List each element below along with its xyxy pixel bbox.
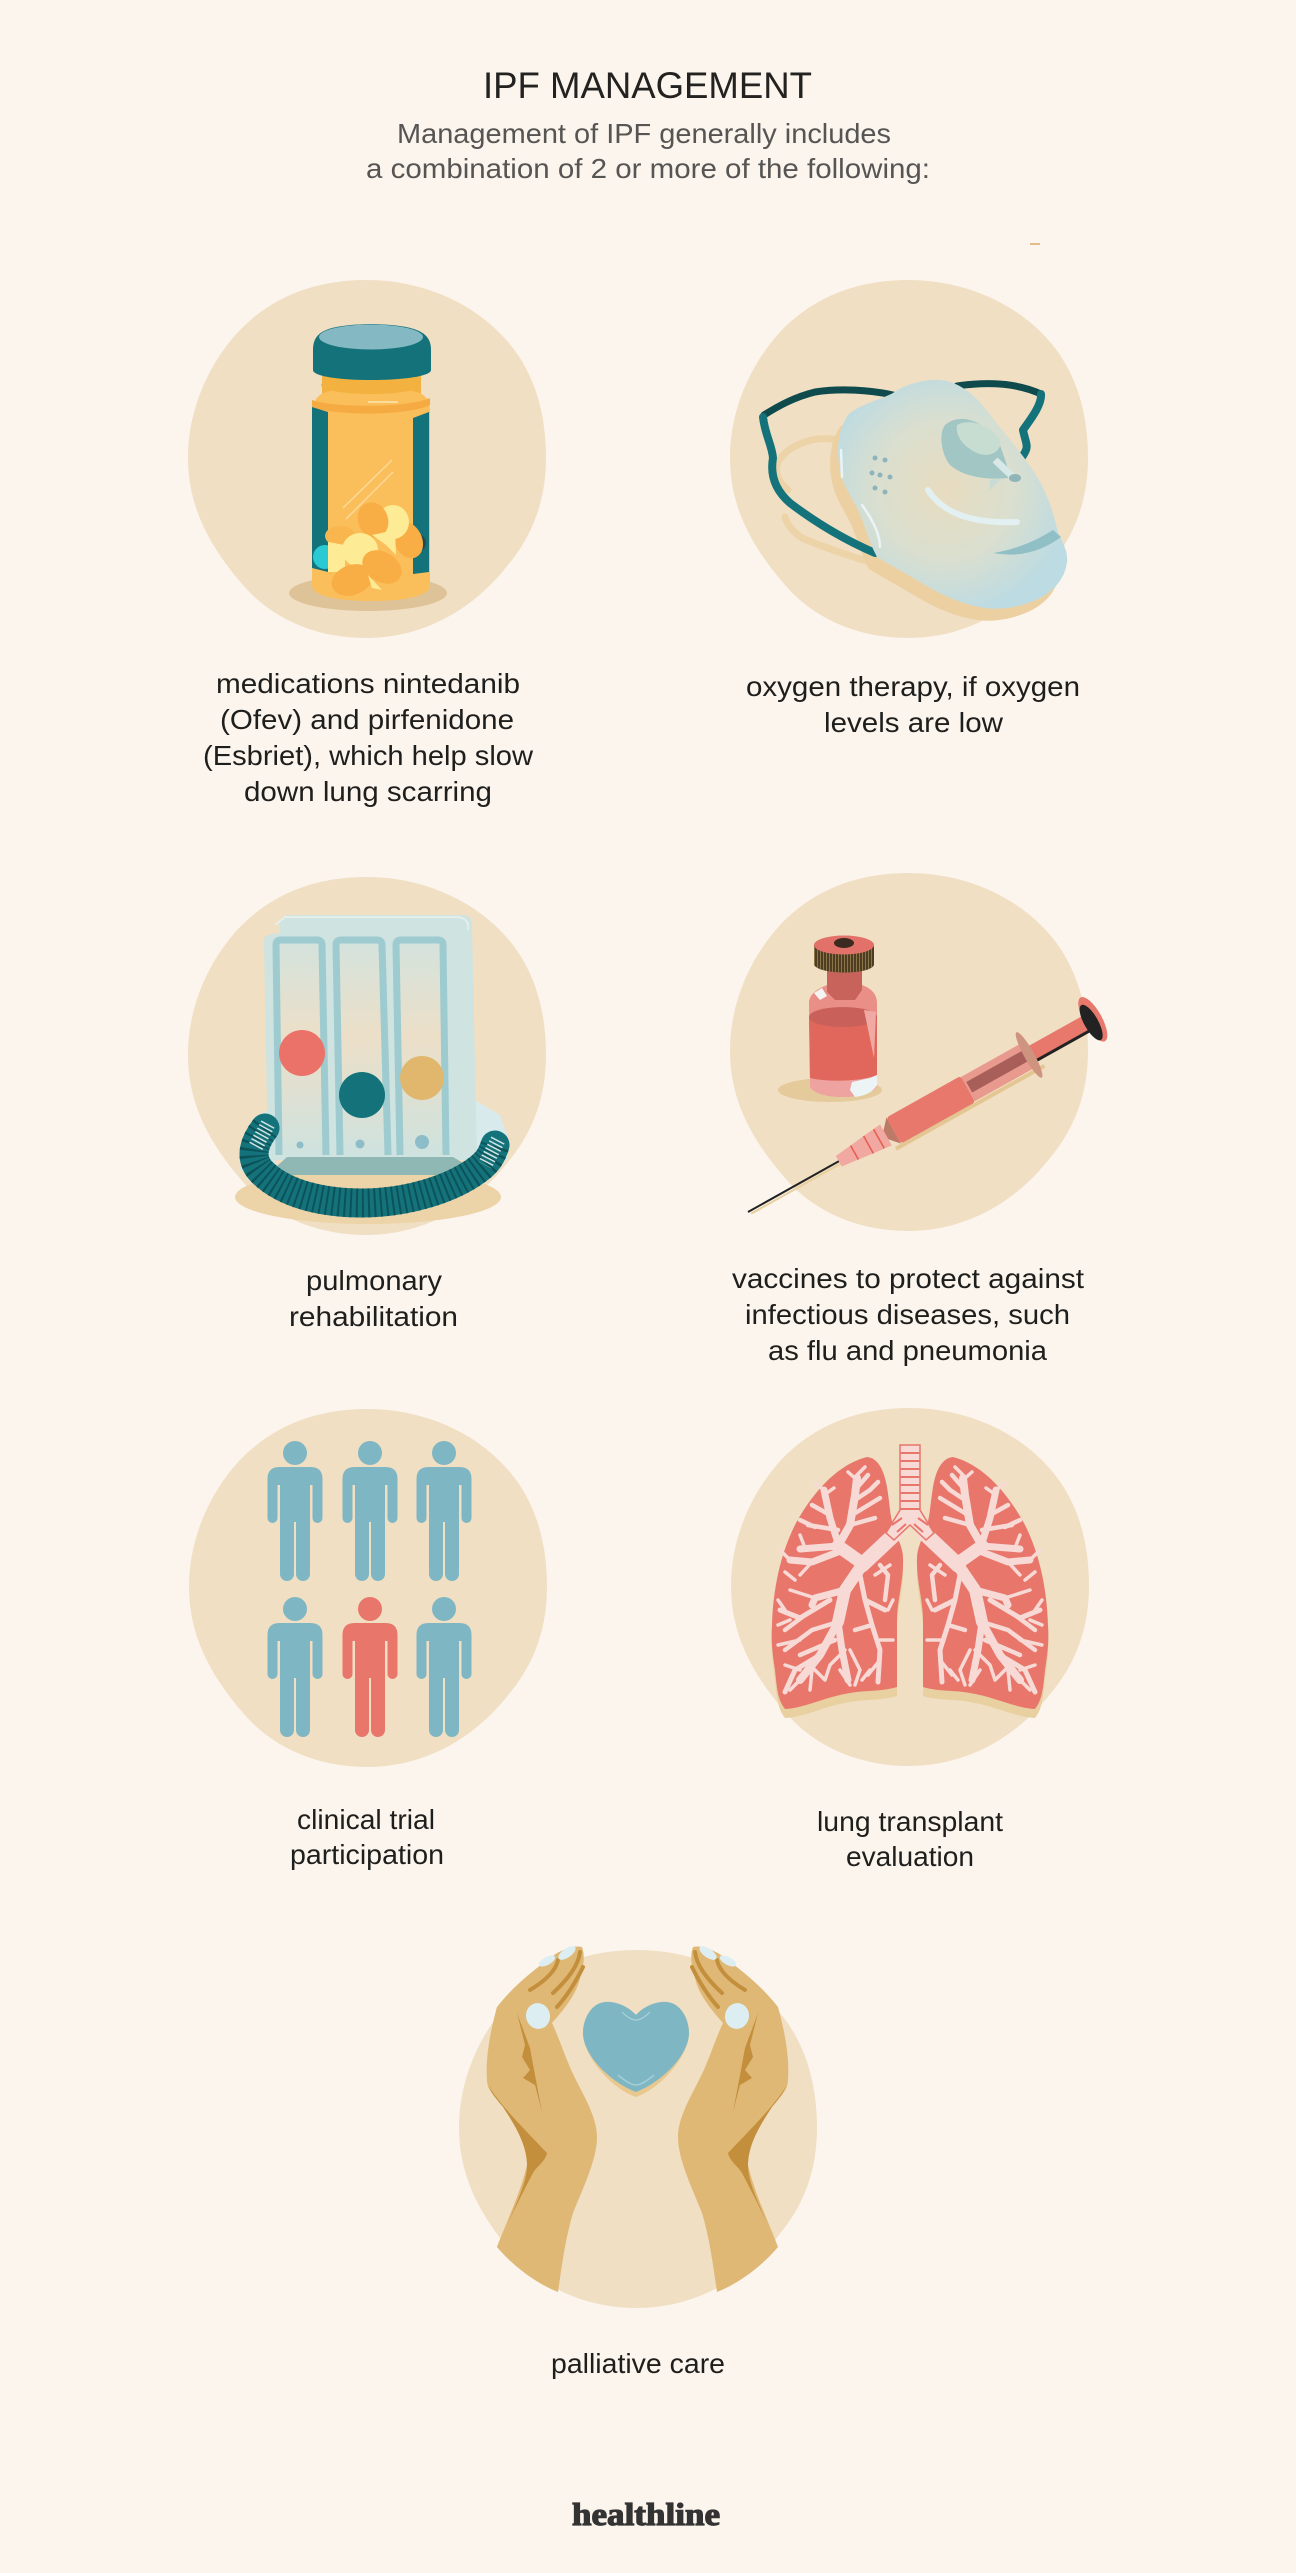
mask vent holes xyxy=(870,456,892,494)
icon: oxygen mask xyxy=(763,380,1067,621)
icon: syringe xyxy=(735,992,1113,1235)
caption: (Ofev) and pirfenidone xyxy=(220,704,514,735)
caption xyxy=(732,1263,1084,1366)
panel: lung transplant evaluation xyxy=(731,1408,1089,1872)
subtitle: a combination of 2 or more of the following: xyxy=(366,153,930,184)
caption: down lung scarring xyxy=(244,776,492,807)
bottle label xyxy=(312,407,429,574)
vial cap xyxy=(814,936,874,972)
caption: (Esbriet), which help slow xyxy=(203,740,534,771)
title: IPF MANAGEMENT xyxy=(483,65,812,106)
trachea xyxy=(886,1445,934,1540)
caption: levels are low xyxy=(824,707,1004,738)
caption xyxy=(289,1265,458,1332)
caption: as flu and pneumonia xyxy=(768,1335,1047,1366)
spirometer balls xyxy=(279,1030,444,1118)
caption: palliative care xyxy=(551,2348,725,2379)
spirometer hose xyxy=(254,1124,498,1203)
icon: group of people xyxy=(268,1441,472,1737)
caption: oxygen therapy, if oxygen xyxy=(746,671,1080,702)
caption: evaluation xyxy=(846,1841,974,1872)
caption: pulmonary xyxy=(306,1265,442,1296)
icon: pill bottle xyxy=(289,324,447,611)
caption: clinical trial xyxy=(297,1804,435,1835)
pills xyxy=(313,502,423,596)
icon: heart xyxy=(583,2002,689,2097)
caption: vaccines to protect against xyxy=(732,1263,1084,1294)
caption: lung transplant xyxy=(817,1806,1003,1837)
caption: infectious diseases, such xyxy=(745,1299,1070,1330)
caption xyxy=(817,1806,1003,1872)
mask body xyxy=(838,380,1067,609)
subtitle: Management of IPF generally includes xyxy=(397,118,891,149)
caption xyxy=(746,671,1080,738)
panel: palliative care xyxy=(459,1944,817,2379)
panel: medications xyxy=(188,280,546,807)
icon: lungs xyxy=(772,1445,1048,1718)
caption xyxy=(290,1804,444,1870)
caption: participation xyxy=(290,1839,444,1870)
caption: medications nintedanib xyxy=(216,668,520,699)
subtitle xyxy=(366,118,930,184)
panel: oxygen therapy xyxy=(730,280,1088,738)
bottle cap xyxy=(313,324,431,380)
panel: vaccines xyxy=(730,873,1113,1366)
caption: rehabilitation xyxy=(289,1301,458,1332)
mask valve xyxy=(941,419,1021,490)
logo: healthline: healthline xyxy=(572,2496,720,2532)
icon: vaccine vial xyxy=(778,936,882,1102)
panel: clinical trial participation xyxy=(189,1409,547,1870)
caption xyxy=(203,668,534,807)
panel: pulmonary rehabilitation xyxy=(188,877,546,1332)
spirometer columns xyxy=(276,940,446,1155)
infographic: IPF management xyxy=(188,72,1108,2526)
icon: incentive spirometer xyxy=(235,915,507,1224)
mask strap xyxy=(763,384,1041,553)
icon: right hand xyxy=(678,1944,788,2292)
icon: left hand xyxy=(487,1944,597,2292)
